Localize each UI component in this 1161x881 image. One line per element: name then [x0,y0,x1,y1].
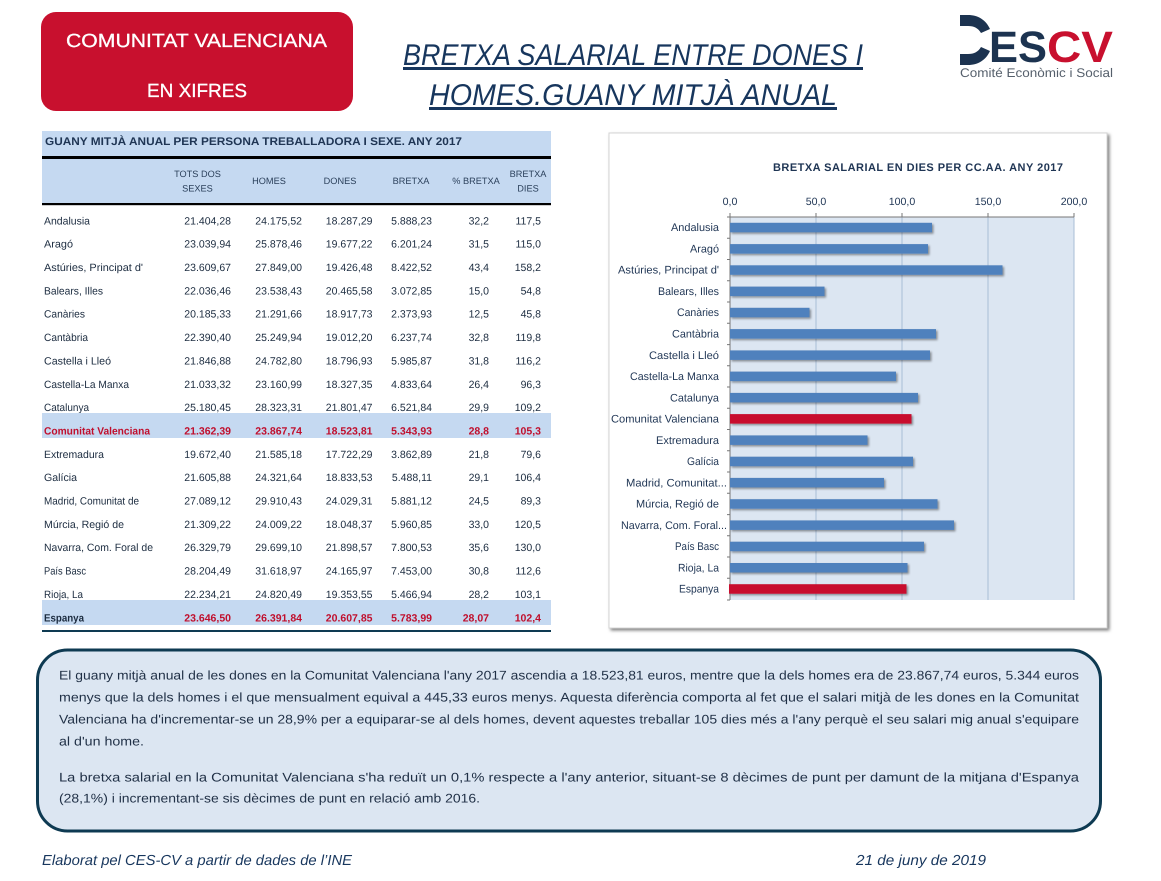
paragraph 2: (28,1%) i incrementant-se sis dècimes de punt en relació amb 2016. [59,792,480,806]
row: Espanya (highlight): 102,4 [515,612,541,624]
row: Rioja: 28,2 [469,589,489,601]
row: Aragó: 6.201,24 [391,239,432,251]
row: Aragó: 115,0 [516,239,541,251]
category labels: Catalunya [670,392,720,404]
category labels: Extremadura [656,435,720,447]
row: Múrcia [44,519,541,531]
row: Astúries: 23.609,67 [184,262,231,274]
row: Astúries: 158,2 [515,262,541,274]
row: Comunitat Valenciana (highlight): 105,3 [515,426,541,438]
row: Galícia: 29,1 [469,472,489,484]
row: Navarra: 35,6 [469,542,489,554]
table title [42,131,551,156]
row: País Basc: 7.453,00 [391,566,432,578]
badge: Comunitat Valenciana en xifres: COMUNITAT VALENCIANA [66,31,327,52]
row: Balears: 15,0 [469,285,489,297]
row: Galícia [44,472,541,484]
row: Espanya (highlight): 5.783,99 [391,612,432,624]
paragraph 2: La bretxa salarial en la Comunitat Valenciana s'ha reduït un 0,1% respecte a l'any anterior, situant-se 8 dècimes de punt per damunt de la mitjana d'Espanya [59,770,1079,784]
row: Rioja: 19.353,55 [326,589,373,601]
badge: Comunitat Valenciana en xifres: EN XIFRES [147,81,247,102]
row: País Basc [44,566,541,578]
title [403,39,863,112]
category labels: Cantàbria [672,328,720,340]
category labels: Comunitat Valenciana [611,414,720,426]
panel: commentary text [38,650,1100,831]
table header row: DIES [517,183,539,193]
row: Catalunya [44,402,541,414]
table header row: % BRETXA [452,176,501,186]
row: Espanya (highlight) [42,600,551,632]
row: Catalunya: 29,9 [469,402,489,414]
row: Navarra: 21.898,57 [326,542,373,554]
row: Navarra [44,542,541,554]
row: Madrid: 24,5 [469,496,489,508]
row: Espanya (highlight): Espanya [44,612,84,624]
row: Extremadura: 79,6 [521,449,541,461]
row: Andalusia: 24.175,52 [255,215,302,227]
row: Canàries: 18.917,73 [326,309,373,321]
paragraph 2 [59,770,1079,806]
row: Castella i Lleó: 116,2 [516,355,541,367]
table header row: BRETXA [510,169,547,179]
category labels: Canàries [677,307,719,319]
axis labels: 200,0 [1061,196,1087,208]
row: Espanya (highlight): 20.607,85 [326,612,373,624]
row: Cantàbria: 119,8 [516,332,541,344]
panel: salary table [42,131,551,632]
row: Extremadura: 21.585,18 [255,449,302,461]
row: País Basc: 30,8 [469,566,489,578]
row: Aragó: 19.677,22 [326,239,373,251]
axis labels: 100,0 [889,196,915,208]
row: Catalunya: 109,2 [515,402,541,414]
row: Castella-La Manxa: 26,4 [469,379,489,391]
row: Extremadura: 3.862,89 [391,449,432,461]
row: Rioja: 22.234,21 [184,589,231,601]
row: Astúries: 8.422,52 [391,262,432,274]
row: Extremadura: 17.722,29 [326,449,373,461]
row: Múrcia: 33,0 [469,519,489,531]
paragraph 1: al d'un home. [59,734,144,748]
row: Canàries: 12,5 [469,309,489,321]
row: Múrcia: 5.960,85 [391,519,432,531]
row: Espanya (highlight): 23.646,50 [184,612,231,624]
row: Astúries [44,262,541,274]
row: Andalusia: 5.888,23 [391,215,432,227]
category labels: Balears, Illes [658,286,719,298]
row: Cantàbria: Cantàbria [44,332,88,344]
row: Navarra: Navarra, Com. Foral de [44,542,153,554]
row: Navarra: 7.800,53 [391,542,432,554]
row: Catalunya: 6.521,84 [391,402,432,414]
plot area [727,213,1074,600]
row: Espanya (highlight): 26.391,84 [255,612,302,624]
row: Rioja: 103,1 [515,589,541,601]
category labels: Madrid, Comunitat... [626,477,727,489]
row: Balears: 3.072,85 [391,285,432,297]
row: Comunitat Valenciana (highlight) [42,413,551,438]
row: Navarra: 130,0 [515,542,541,554]
row: Catalunya: 25.180,45 [184,402,231,414]
row: Astúries: 27.849,00 [255,262,302,274]
row: Aragó: 25.878,46 [255,239,302,251]
row: Andalusia [44,215,541,227]
row: País Basc: 24.165,97 [326,566,373,578]
row: Extremadura: 21,8 [469,449,489,461]
row: Castella i Lleó: 21.846,88 [184,355,231,367]
row: Aragó: 31,5 [469,239,489,251]
row: Navarra: 29.699,10 [255,542,302,554]
row: Rioja: Rioja, La [44,589,83,601]
logo: CES-CV [960,15,1114,80]
row: Castella i Lleó: 18.796,93 [326,355,373,367]
row: Comunitat Valenciana (highlight): 23.867,74 [255,426,302,438]
category labels: Rioja, La [678,562,720,574]
logo: CES-CV: CV [1047,23,1114,72]
row: Múrcia: 18.048,37 [326,519,373,531]
row: Galícia: 106,4 [515,472,541,484]
row: Canàries: 45,8 [521,309,541,321]
paragraph 1: El guany mitjà anual de les dones en la Comunitat Valenciana l'any 2017 ascendia a 18.523,81 euros, mentre que la dels homes era de 23.867,74 euros, 5.344 euros [59,668,1079,682]
row: Madrid: 89,3 [521,496,541,508]
row: Cantàbria: 6.237,74 [391,332,432,344]
logo: CES-CV: Comité Econòmic i Social [960,66,1113,80]
row: Extremadura: 19.672,40 [184,449,231,461]
row: Canàries: Canàries [44,309,85,321]
row: Espanya (highlight): 28,07 [463,612,489,624]
row: Andalusia: Andalusia [44,215,90,227]
footer: source: Elaborat pel CES-CV a partir de dades de l’INE [42,853,352,869]
row: Andalusia: 32,2 [469,215,489,227]
row: Canàries: 20.185,33 [184,309,231,321]
table header row: BRETXA [393,176,430,186]
row: Aragó: Aragó [44,239,73,251]
row: País Basc: 28.204,49 [184,566,231,578]
row: Castella-La Manxa: 21.033,32 [184,379,231,391]
category labels: País Basc [675,541,719,553]
row: Cantàbria: 22.390,40 [184,332,231,344]
row: Cantàbria: 19.012,20 [326,332,373,344]
row: Castella-La Manxa: 4.833,64 [391,379,432,391]
row: Cantàbria: 32,8 [469,332,489,344]
row: Madrid: 29.910,43 [255,496,302,508]
row: Catalunya: 28.323,31 [255,402,302,414]
row: Extremadura [44,449,541,461]
chart title: BRETXA SALARIAL EN DIES PER CC.AA. ANY 2017 [773,162,1063,174]
category labels: Astúries, Principat d' [618,265,719,277]
row: Andalusia: 21.404,28 [184,215,231,227]
category labels: Aragó [690,244,719,256]
row: Galícia: 18.833,53 [326,472,373,484]
category labels: Múrcia, Regió de [636,499,719,511]
row: Catalunya: Catalunya [44,402,89,414]
row: Galícia: 21.605,88 [184,472,231,484]
row: Múrcia: Múrcia, Regió de [44,519,124,531]
row: Balears: 22.036,46 [184,285,231,297]
row: Rioja: 24.820,49 [255,589,302,601]
row: Canàries: 2.373,93 [391,309,432,321]
category labels [611,222,727,596]
row: Balears: 20.465,58 [326,285,373,297]
row: Astúries: 19.426,48 [326,262,373,274]
category labels: Andalusia [671,222,720,234]
row: Astúries: Astúries, Principat d' [44,262,143,274]
table header row [42,156,551,205]
row: Andalusia: 18.287,29 [326,215,373,227]
paragraph 1: Valenciana ha d'incrementar-se un 28,9% per a equiparar-se al dels homes, devent aquestes treballar 105 dies més a l'any perquè el seu salari mig anual s'equipare [59,712,1079,726]
row: Castella-La Manxa [44,379,541,391]
row: Madrid: 27.089,12 [184,496,231,508]
bars [729,223,1002,594]
row: Galícia: Galícia [44,472,77,484]
axis labels: 50,0 [806,196,826,208]
row: Aragó: 23.039,94 [184,239,231,251]
row: Rioja [44,589,541,601]
title: BRETXA SALARIAL ENTRE DONES I [403,39,863,72]
row: Catalunya: 21.801,47 [326,402,373,414]
row: Canàries: 21.291,66 [255,309,302,321]
row: Castella i Lleó: Castella i Lleó [44,355,111,367]
badge: Comunitat Valenciana en xifres [41,12,353,111]
row: Cantàbria: 25.249,94 [255,332,302,344]
paragraph 1 [59,668,1080,748]
table header row: HOMES [252,176,286,186]
row: Múrcia: 120,5 [515,519,541,531]
category labels: Navarra, Com. Foral... [621,520,727,532]
row: Comunitat Valenciana (highlight): 5.343,93 [391,426,432,438]
row: Galícia: 24.321,64 [255,472,302,484]
row: Castella i Lleó: 31,8 [469,355,489,367]
table title: GUANY MITJÀ ANUAL PER PERSONA TREBALLADORA I SEXE. ANY 2017 [45,135,462,148]
row: Comunitat Valenciana (highlight): 21.362,39 [184,426,231,438]
row: Balears: 54,8 [521,285,541,297]
axis labels [723,196,1087,208]
row: Galícia: 5.488,11 [392,472,432,484]
category labels: Castella-La Manxa [630,371,720,383]
row: Balears: 23.538,43 [255,285,302,297]
title: HOMES.GUANY MITJÀ ANUAL [429,78,837,112]
row: Castella-La Manxa: 96,3 [521,379,541,391]
row: Comunitat Valenciana (highlight): Comunitat Valenciana [44,426,150,438]
row: Rioja: 5.466,94 [391,589,432,601]
table header row: DONES [324,176,356,186]
table header row: TOTS DOS [174,169,221,179]
category labels: Galícia [687,456,720,468]
row: Madrid: Madrid, Comunitat de [44,496,139,508]
row: Castella-La Manxa: Castella-La Manxa [44,379,129,391]
axis labels: 0,0 [723,196,737,208]
footer: date: 21 de juny de 2019 [855,853,986,869]
row: Cantàbria [44,332,541,344]
row: Navarra: 26.329,79 [184,542,231,554]
row: Extremadura: Extremadura [44,449,104,461]
row: Comunitat Valenciana (highlight): 18.523,81 [326,426,373,438]
row: Balears [44,285,541,297]
row: Castella i Lleó: 5.985,87 [391,355,432,367]
row: Castella i Lleó: 24.782,80 [255,355,302,367]
row: País Basc: País Basc [44,566,87,578]
row: Castella-La Manxa: 18.327,35 [326,379,373,391]
row: Castella i Lleó [44,355,541,367]
row: Madrid [44,496,541,508]
row: Madrid: 5.881,12 [391,496,432,508]
row: Andalusia: 117,5 [516,215,541,227]
row: Balears: Balears, Illes [44,285,103,297]
axis labels: 150,0 [975,196,1001,208]
category labels: Castella i Lleó [649,350,719,362]
panel: bar chart [609,133,1107,628]
row: Astúries: 43,4 [469,262,489,274]
row: Múrcia: 24.009,22 [255,519,302,531]
table header row: SEXES [182,183,213,193]
row: Comunitat Valenciana (highlight): 28,8 [469,426,489,438]
category labels: Espanya [679,584,720,596]
paragraph 1: menys que la dels homes i el que mensualment equival a 445,33 euros menys. Aquesta diferència comporta al fet que el salari mitjà de les dones en la Comunitat [59,690,1080,704]
row: Castella-La Manxa: 23.160,99 [255,379,302,391]
row: Canàries [44,309,541,321]
logo: CES-CV: ES [989,23,1047,72]
row: País Basc: 31.618,97 [255,566,302,578]
row: Madrid: 24.029,31 [326,496,373,508]
row: Aragó [44,239,541,251]
row: País Basc: 112,6 [516,566,541,578]
row: Múrcia: 21.309,22 [184,519,231,531]
